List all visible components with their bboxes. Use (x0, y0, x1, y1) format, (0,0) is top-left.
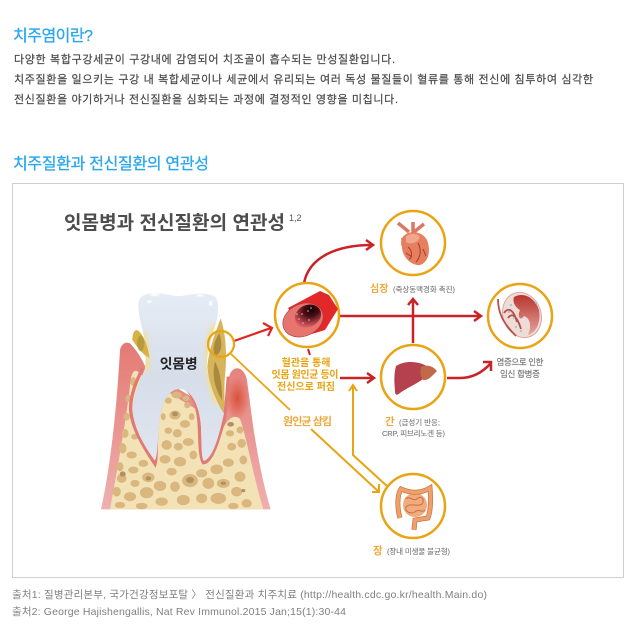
label: liver: 간 (385, 416, 395, 428)
root gum lining (131, 368, 228, 464)
arrow: liver to placenta (447, 362, 491, 378)
tooth (133, 293, 224, 461)
arrow: bacteria swallowed, lower segment (311, 429, 379, 492)
heart shading (406, 243, 426, 262)
placenta sac (496, 287, 548, 343)
liver lobe (394, 362, 428, 395)
small bowel folds (405, 497, 425, 513)
label: pregnancy complications: 염증으로 인한 (496, 357, 544, 367)
label: intestine (373, 545, 450, 557)
heart vessels (398, 222, 424, 246)
arrow: vessel to placenta (340, 311, 481, 321)
sources: 출처2: George Hajishengallis, Nat Rev Immunol.2015 Jan;15(1):30-44 (12, 606, 346, 618)
label: intestine: (장내 미생물 불균형) (387, 546, 450, 556)
arrow: gut to liver (349, 385, 388, 487)
label: pregnancy complications (496, 357, 544, 379)
label: bacteria swallowed: 원인균 삼킴 (283, 414, 332, 428)
icon: placenta (488, 284, 552, 348)
bone (110, 371, 263, 509)
label: heart (370, 282, 456, 295)
arrow: vessel down stub (308, 349, 310, 355)
tooth label: 잇몸병 (160, 356, 198, 371)
label: liver (382, 416, 446, 438)
blood particles (296, 307, 312, 324)
umbilical vessels (498, 299, 521, 336)
plaque right dark (214, 333, 222, 400)
vessel lumen (291, 300, 325, 332)
plaque right (207, 318, 226, 413)
placenta dots (508, 302, 537, 332)
label: through bloodstream (272, 356, 338, 393)
label: intestine: 장 (373, 545, 383, 557)
intro text block (14, 52, 593, 106)
gallbladder lobe (420, 366, 437, 380)
label: pregnancy complications: 임신 합병증 (500, 369, 540, 379)
arrow: vessel to liver (340, 373, 374, 383)
label: liver: (급성기 반응; (399, 418, 440, 427)
illustration: tooth with gum disease (101, 293, 271, 509)
intro text block: 치주질환을 일으키는 구강 내 복합세균이나 세균에서 유리되는 여러 독성 물질들이 혈류를 통해 전신에 침투하여 심각한 (14, 72, 593, 86)
small bowel mass (403, 493, 427, 517)
plaque left (132, 330, 149, 357)
sources: 출처1: 질병관리본부, 국가건강정보포탈 〉 전신질환과 치주치료 (http://health.cdc.go.kr/health.Main.do) (12, 588, 487, 601)
arrow: bacteria swallowed, upper segment (231, 354, 290, 410)
gum inflammation (225, 376, 249, 420)
placenta tissue (513, 295, 540, 335)
icon: blood vessel (275, 283, 339, 347)
bone pores (113, 378, 251, 509)
plaque glow on tooth (142, 325, 218, 403)
intro text block: 다양한 복합구강세균이 구강내에 감염되어 치조골이 흡수되는 만성질환입니다. (14, 52, 395, 66)
gum (101, 343, 271, 509)
small circle on gum (208, 331, 234, 357)
label: through bloodstream: 전신으로 퍼짐 (277, 380, 335, 393)
icon: intestine (381, 474, 445, 538)
label: heart: (죽상동맥경화 촉진) (393, 284, 456, 294)
heart body (402, 232, 429, 265)
diagram title: 잇몸병과 전신질환의 연관성 (64, 212, 285, 234)
sources (12, 588, 487, 618)
label: through bloodstream: 혈관을 통해 (282, 356, 330, 369)
tooth highlights (147, 293, 212, 306)
icon: heart (381, 211, 445, 275)
panel: diagram (12, 184, 624, 578)
diagram title: 1,2 (289, 213, 302, 223)
icon: liver (381, 345, 445, 409)
intro text block: 전신질환을 야기하거나 전신질환을 심화되는 과정에 결정적인 영향을 미칩니다. (14, 92, 398, 106)
large bowel (398, 488, 431, 530)
heart light area (406, 234, 420, 243)
arrow: liver to heart (408, 299, 418, 343)
large bowel outline (398, 488, 431, 530)
label: liver: CRP, 피브리노겐 등) (382, 429, 446, 438)
label: through bloodstream: 잇몸 원인균 등이 (272, 368, 338, 381)
plaque left dark (137, 335, 144, 351)
vessel tube (288, 291, 338, 336)
dark bone pores (120, 412, 245, 492)
arrow: gum to vessel (234, 323, 272, 341)
arrow: vessel to heart (304, 240, 373, 283)
heading: what is periodontitis: 치주염이란? (13, 27, 93, 45)
heading: relationship section: 치주질환과 전신질환의 연관성 (13, 155, 209, 173)
label: heart: 심장 (370, 282, 388, 295)
vessel opening (277, 297, 329, 343)
